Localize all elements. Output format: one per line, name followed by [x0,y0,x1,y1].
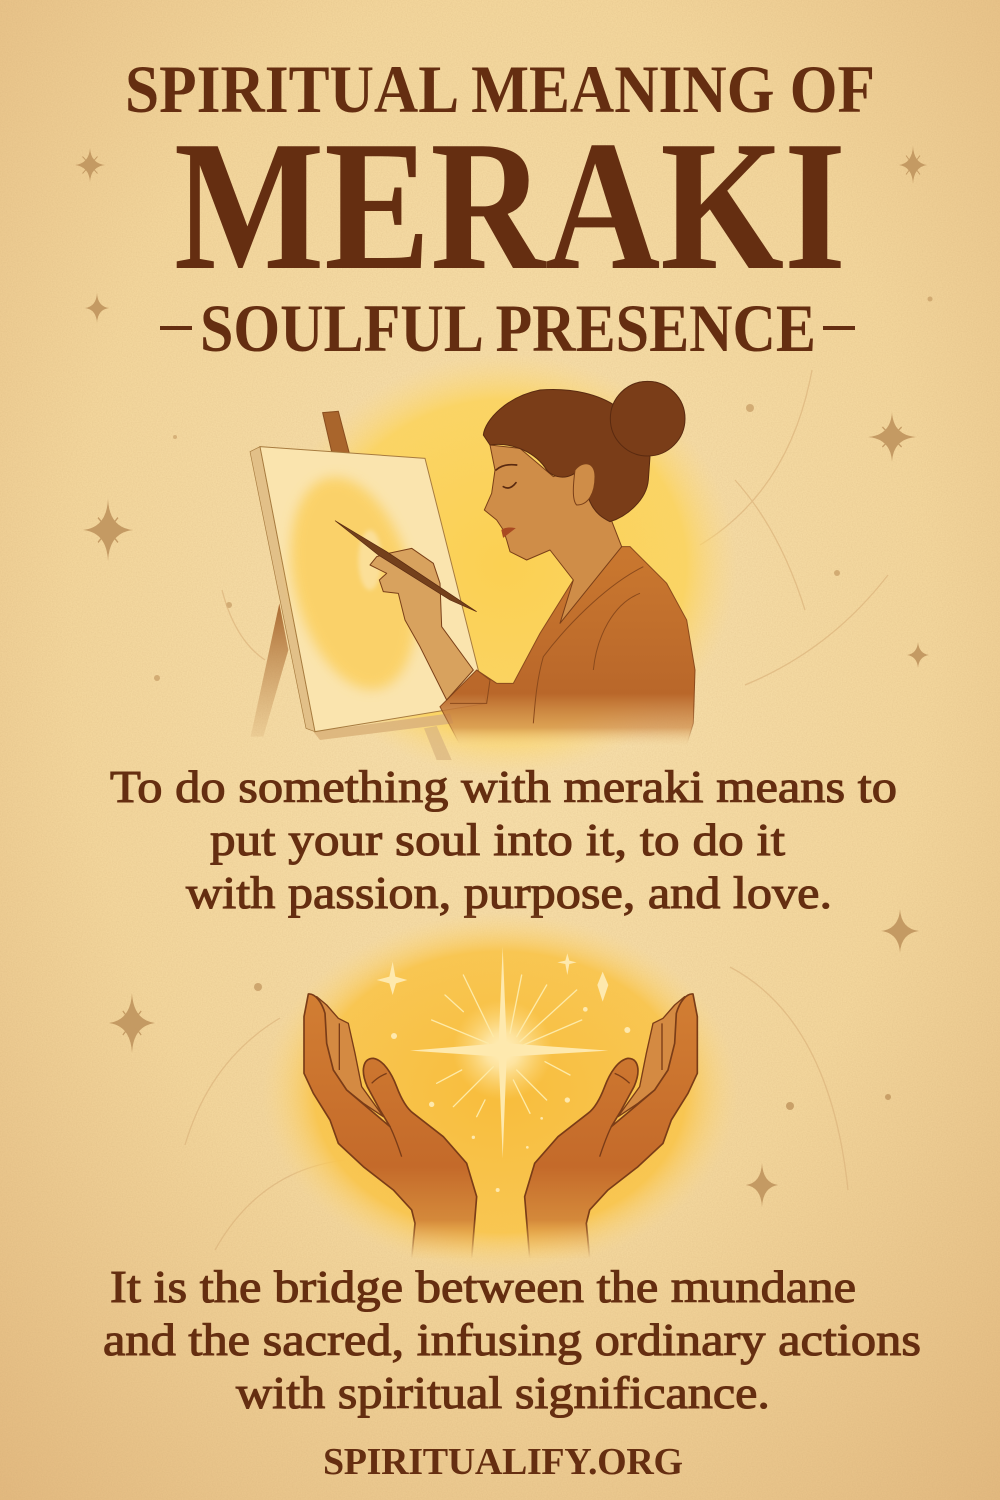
illustration: woman painting at easel [250,353,737,777]
paintbrush [335,521,477,612]
text block: bridge: with spiritual significance. [236,1367,770,1418]
illustration: cupped hands holding light [262,912,738,1272]
left hand [304,994,477,1258]
easel [251,411,453,760]
text block: bridge: and the sacred, infusing ordinary actions [103,1314,921,1365]
eye, brow and lips [496,465,517,537]
footer: website: SPIRITUALIFY.ORG [323,1441,683,1483]
right hand [525,994,697,1258]
text block: meaning [110,761,897,918]
neck and face [484,445,622,623]
text block: meaning: To do something with meraki means to [110,761,897,812]
hair [483,389,650,522]
text block: meaning: put your soul into it, to do it [210,814,785,865]
title: spiritual meaning of: SPIRITUAL MEANING OF [125,51,875,127]
robe folds [450,567,643,723]
text block: bridge: It is the bridge between the mundane [110,1261,856,1312]
text block: meaning: with passion, purpose, and love. [186,867,832,918]
robe [440,547,695,745]
starburst [377,947,630,1192]
canvas with yellow swirl [250,447,487,732]
title: meraki: MERAKI [174,103,846,309]
subtitle: soulful presence: SOULFUL PRESENCE [200,290,816,366]
ear [573,464,595,505]
arm and hand [370,548,473,700]
decorative stars and dots [75,146,932,1250]
hair bun [610,381,685,456]
text block: bridge [103,1261,921,1418]
